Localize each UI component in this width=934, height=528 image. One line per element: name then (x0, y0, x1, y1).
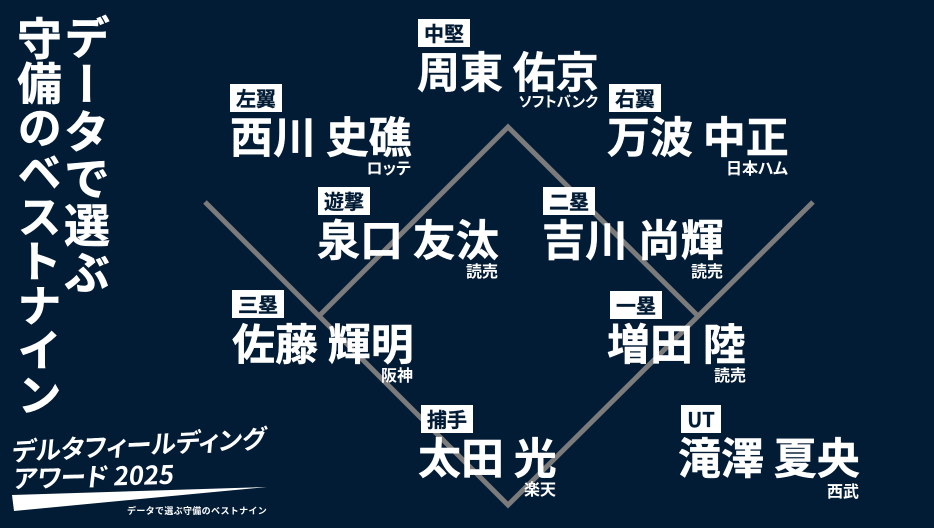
text: 日本ハム (726, 155, 788, 179)
text: 左翼 (236, 83, 276, 112)
text: 太田 光 (418, 425, 557, 487)
player: second baseman (542, 186, 724, 282)
title: vertical heading: データで選ぶ (54, 14, 120, 296)
text: 読売 (691, 258, 723, 282)
title: vertical heading: 守備のベストナイン (7, 16, 72, 416)
text: ロッテ (366, 155, 411, 179)
player: center fielder (417, 18, 599, 112)
text: UT (687, 404, 715, 433)
player: right fielder (607, 83, 789, 179)
text: ソフトバンク (519, 91, 598, 112)
text: 西武 (827, 478, 859, 502)
text: 佐藤 輝明 (232, 311, 414, 373)
text: 読売 (714, 362, 746, 386)
text: 滝澤 夏央 (678, 425, 860, 487)
text: 西川 史礁 (230, 104, 412, 166)
text: 増田 陸 (607, 311, 746, 373)
text: 吉川 尚輝 (542, 207, 724, 269)
logo heading line 2: アワード 2025 (12, 455, 176, 496)
text: 周東 佑京 (417, 39, 599, 101)
text: 泉口 友汰 (317, 207, 499, 269)
text: 三塁 (238, 289, 278, 318)
player: third baseman (232, 289, 414, 386)
logo heading line 1: デルタフィールディング (11, 418, 268, 469)
player: catcher (418, 404, 557, 500)
player: shortstop (317, 186, 499, 282)
text: 読売 (466, 258, 498, 282)
text: 捕手 (427, 404, 467, 433)
player: first baseman (607, 290, 746, 386)
text: 遊撃 (324, 186, 364, 215)
text: 万波 中正 (607, 104, 789, 166)
text: 阪神 (381, 362, 413, 386)
text: 一塁 (616, 290, 656, 319)
text: 中堅 (424, 18, 464, 47)
text: 楽天 (524, 476, 556, 500)
text: 二塁 (549, 186, 589, 215)
player: left fielder (230, 83, 412, 179)
logo tagline: データで選ぶ守備のベストナイン (127, 504, 267, 517)
text: 右翼 (615, 83, 655, 112)
player: utility (678, 404, 860, 502)
